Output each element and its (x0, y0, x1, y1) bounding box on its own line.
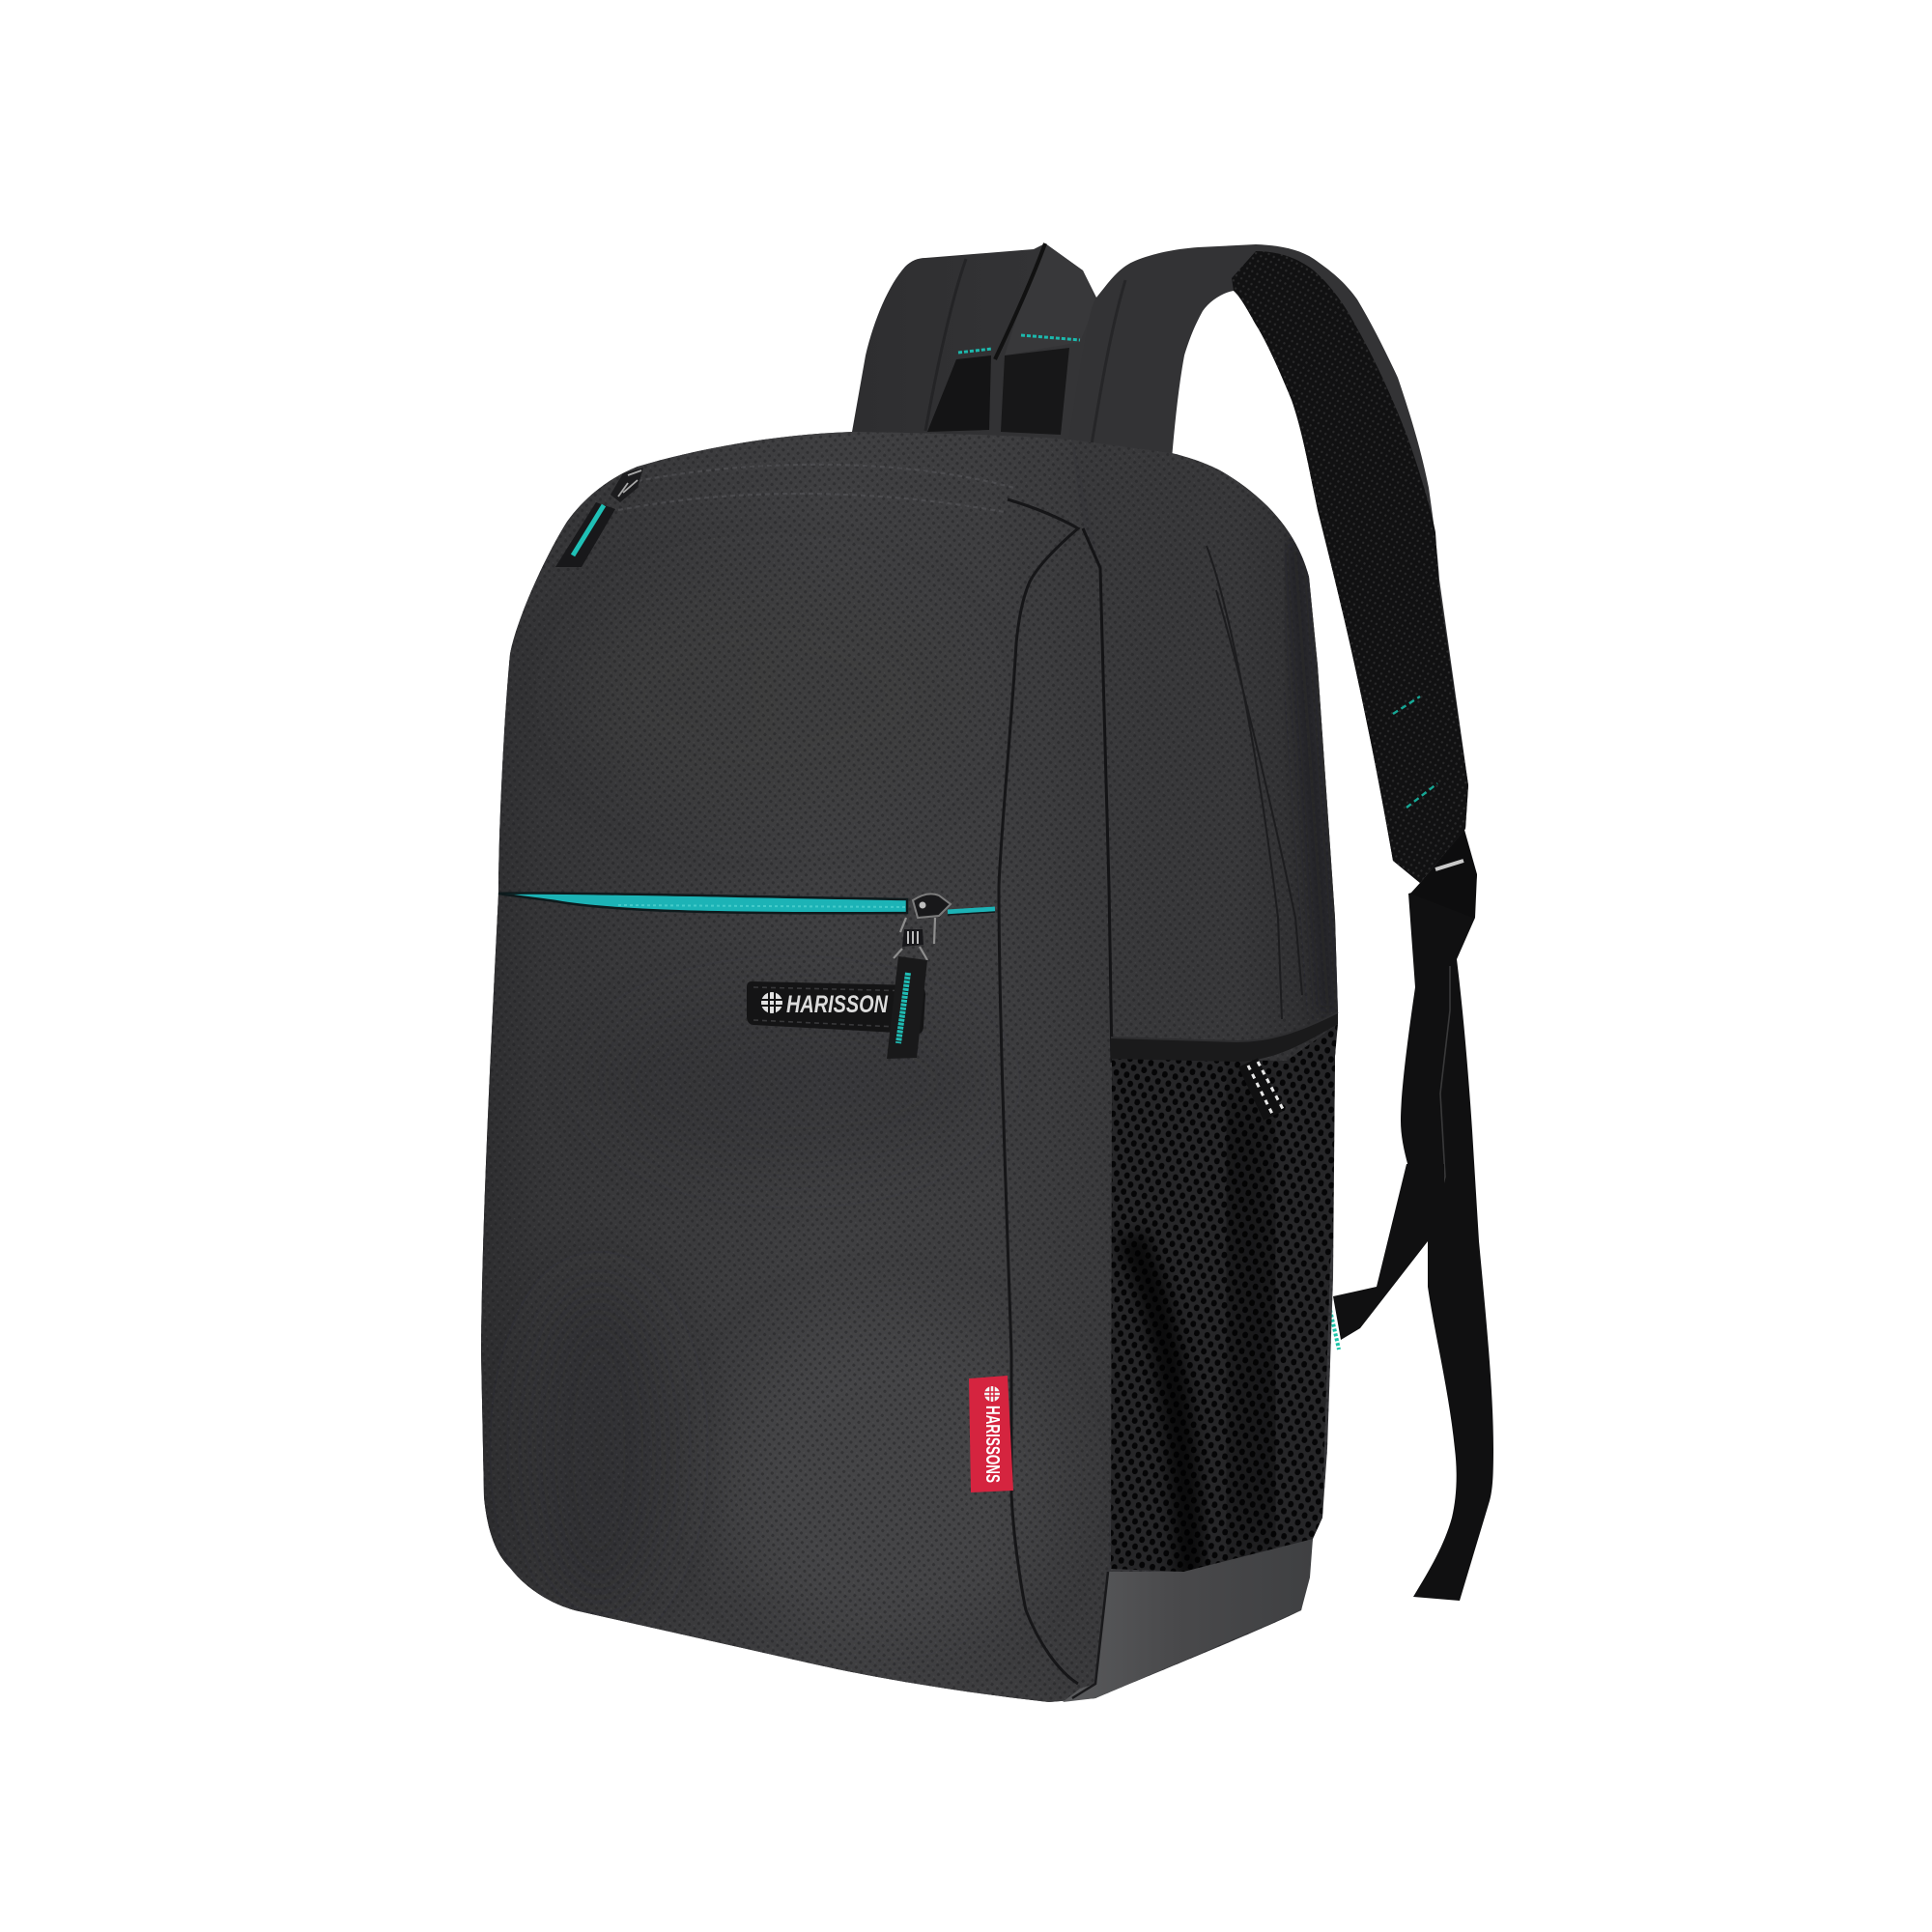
teal stitching on connector (1330, 1310, 1339, 1350)
main body (464, 415, 1352, 1710)
front zipper pull (887, 894, 951, 1059)
fabric texture (464, 415, 1352, 1710)
gusset seam (1083, 528, 1112, 1063)
strap black mesh underside (1232, 251, 1468, 883)
label wordmark: HARISSON (786, 991, 889, 1018)
side mesh pocket (1111, 1012, 1338, 1584)
backpack product illustration (481, 242, 1493, 1702)
right shoulder strap padded (1067, 244, 1468, 883)
top corner zipper pull (555, 468, 643, 567)
front zipper in teal (498, 894, 995, 915)
side panel stitched lines (1207, 546, 1302, 1019)
top handle and left shoulder strap base (852, 243, 1150, 454)
mesh folds (1130, 1236, 1190, 1584)
teal stitch left (958, 349, 992, 353)
teal strap stitches (1393, 696, 1437, 808)
side panel darker edge (1294, 541, 1328, 1014)
black webbing loop right (1001, 348, 1069, 435)
long lower shoulder webbing (1401, 874, 1493, 1601)
body silhouette (481, 432, 1338, 1702)
strap buckle (1410, 830, 1477, 918)
side upper panel (1184, 456, 1338, 1055)
center handle flap (1005, 243, 1096, 355)
label logo (761, 992, 782, 1013)
zipper pull tab (887, 956, 927, 1059)
lower side connector strap (1330, 1164, 1444, 1350)
top ridge highlights (618, 465, 1014, 512)
front seam (999, 499, 1078, 1684)
front panel (464, 415, 1114, 1710)
red brand tag (969, 1376, 1013, 1492)
red tag wordmark: HARISSONS (981, 1406, 1003, 1483)
reflective drawcord (1248, 1062, 1283, 1116)
red tag logo (984, 1386, 1000, 1402)
harissons woven front label (747, 981, 925, 1034)
teal pull stitching (898, 973, 908, 1043)
front soft shading (599, 995, 985, 1169)
teal stitch right (1021, 335, 1080, 340)
black webbing loop left (927, 355, 991, 432)
base panel (1063, 1539, 1313, 1702)
mesh pocket top binding (1111, 1012, 1338, 1062)
